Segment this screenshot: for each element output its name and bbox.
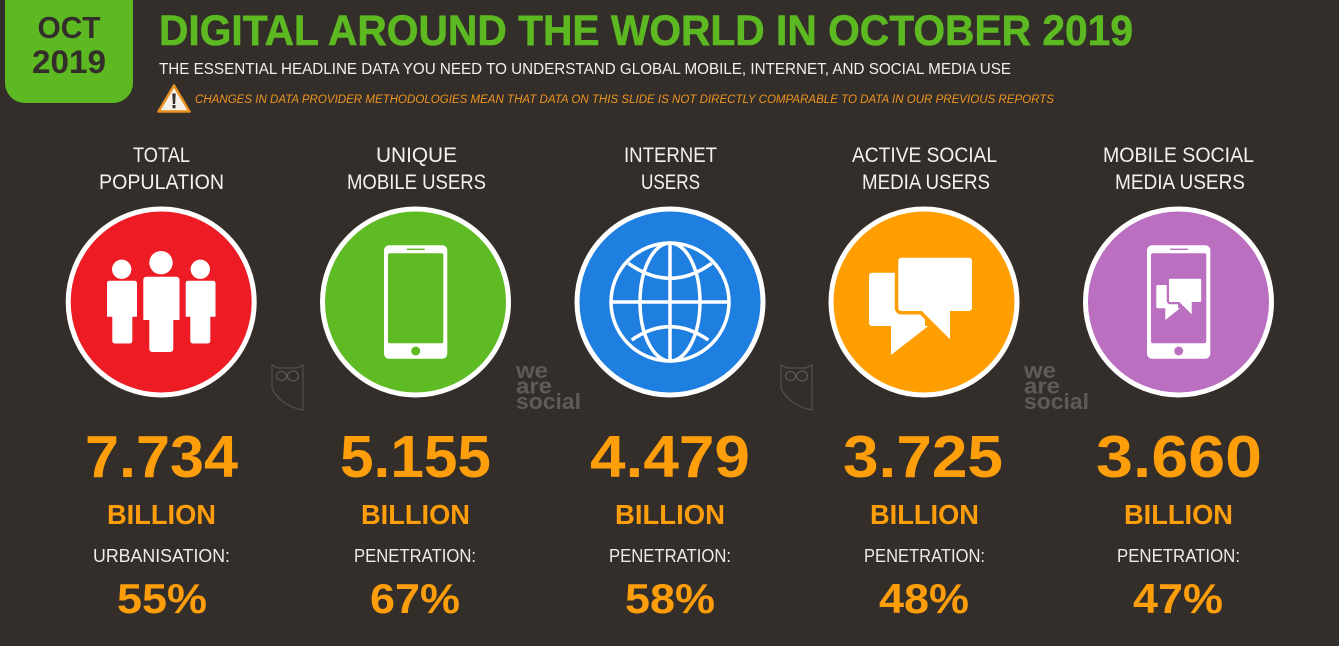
metric: penetration 58%: 58%	[625, 575, 715, 622]
watermark: we are social 2: social	[1024, 389, 1089, 414]
watermark: we are social 2: we	[1023, 358, 1056, 383]
metric: penetration 47%: 47%	[1133, 575, 1223, 622]
heading: total population: POPULATION	[99, 171, 224, 194]
watermark: we are social 1: we	[515, 358, 548, 383]
metric: penetration 67%	[354, 546, 476, 622]
heading: internet users: INTERNET	[624, 144, 717, 167]
metric: penetration 47%: PENETRATION:	[1117, 546, 1240, 566]
heading: internet users	[624, 144, 717, 194]
heading: active social media users	[852, 144, 997, 194]
metric: urbanisation 55%: 55%	[117, 575, 207, 622]
heading: unique mobile users: MOBILE USERS	[347, 171, 486, 194]
value: 3.725 billion: 3.725	[843, 424, 1003, 490]
watermark: owl logo 1	[272, 365, 303, 410]
value: 3.725 billion: BILLION	[870, 499, 979, 530]
heading: total population: TOTAL	[133, 144, 190, 167]
metric: urbanisation 55%	[93, 546, 230, 622]
watermark: we are social 1	[515, 358, 581, 414]
metric: penetration 48%: 48%	[879, 575, 969, 622]
value: 7.734 billion: 7.734	[85, 424, 238, 490]
date badge: 2019	[32, 44, 106, 80]
value: 4.479 billion	[590, 424, 750, 530]
metric: penetration 58%: PENETRATION:	[609, 546, 731, 566]
value: 4.479 billion: 4.479	[590, 424, 750, 490]
metric: penetration 47%	[1117, 546, 1240, 622]
icon: speech bubbles	[831, 209, 1017, 395]
title: DIGITAL AROUND THE WORLD IN OCTOBER 2019	[159, 7, 1133, 55]
heading: total population	[99, 144, 224, 194]
heading: active social media users: ACTIVE SOCIAL	[852, 144, 997, 167]
icon: people	[68, 209, 254, 395]
value: 3.660 billion: 3.660	[1096, 424, 1262, 490]
watermark: we are social 1: social	[516, 389, 581, 414]
heading: unique mobile users	[347, 144, 486, 194]
value: 4.479 billion: BILLION	[615, 499, 725, 530]
subtitle: THE ESSENTIAL HEADLINE DATA YOU NEED TO UNDERSTAND GLOBAL MOBILE, INTERNET, AND SOCIAL MEDIA USE	[159, 61, 1011, 78]
metric: penetration 67%: PENETRATION:	[354, 546, 476, 566]
date badge	[5, 0, 133, 103]
value: 5.155 billion: 5.155	[340, 424, 491, 490]
icon: globe	[577, 209, 763, 395]
panel: mobile social media users	[1086, 144, 1272, 622]
panel: internet users	[577, 144, 763, 622]
value: 7.734 billion: BILLION	[107, 499, 216, 530]
metric: penetration 67%: 67%	[370, 575, 460, 622]
icon: warning triangle	[158, 86, 190, 112]
panel: active social media users	[831, 144, 1017, 622]
value: 7.734 billion	[85, 424, 238, 530]
watermark: owl logo 2	[781, 365, 812, 410]
value: 5.155 billion: BILLION	[361, 499, 470, 530]
icon: phone with speech bubbles	[1086, 209, 1272, 395]
heading: mobile social media users	[1103, 144, 1254, 194]
icon: mobile phone	[322, 209, 508, 395]
date badge: OCT	[38, 10, 101, 45]
value: 5.155 billion	[340, 424, 491, 530]
value: 3.660 billion: BILLION	[1124, 499, 1233, 530]
panel: unique mobile users	[322, 144, 508, 622]
heading: unique mobile users: UNIQUE	[376, 144, 457, 167]
metric: penetration 48%: PENETRATION:	[864, 546, 985, 566]
panel: total population	[68, 144, 254, 622]
heading: mobile social media users: MEDIA USERS	[1115, 171, 1245, 194]
watermark: we are social 2	[1023, 358, 1089, 414]
metric: urbanisation 55%: URBANISATION:	[93, 546, 230, 566]
watermark: we are social 1: are	[516, 374, 552, 398]
heading: active social media users: MEDIA USERS	[862, 171, 990, 194]
watermark: we are social 2: are	[1024, 374, 1060, 398]
heading: internet users: USERS	[641, 171, 700, 194]
metric: penetration 58%	[609, 546, 731, 622]
value: 3.725 billion	[843, 424, 1003, 530]
metric: penetration 48%	[864, 546, 985, 622]
methodology warning: CHANGES IN DATA PROVIDER METHODOLOGIES MEAN THAT DATA ON THIS SLIDE IS NOT DIRECTLY COMPARABLE TO DATA IN OUR PREVIOUS REPORTS	[195, 94, 1054, 106]
heading: mobile social media users: MOBILE SOCIAL	[1103, 144, 1254, 167]
value: 3.660 billion	[1096, 424, 1262, 530]
